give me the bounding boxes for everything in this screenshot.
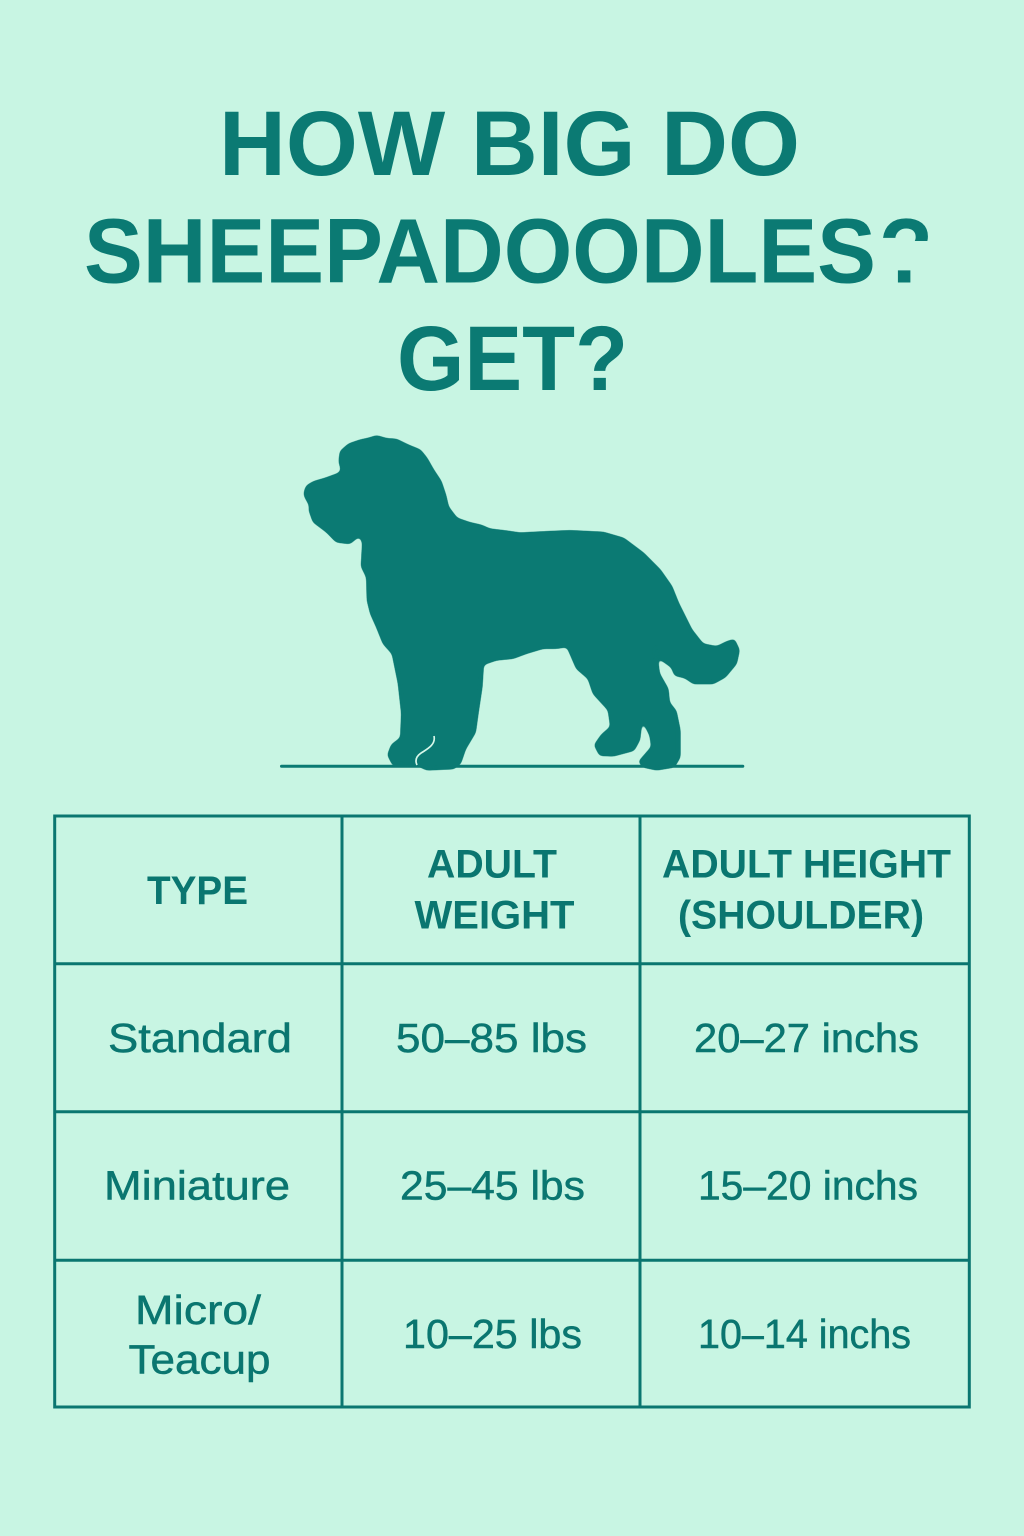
row: micro / teacup: 10–14 inchs	[698, 1311, 911, 1357]
row: standard: 20–27 inchs	[694, 1015, 919, 1061]
header: type: TYPE	[147, 869, 248, 913]
header: adult height (shoulder): (SHOULDER)	[678, 894, 924, 938]
row: micro / teacup: 10–25 lbs	[403, 1311, 582, 1357]
row: micro / teacup	[128, 1287, 911, 1382]
title line 3: GET?	[397, 308, 628, 410]
header: adult weight: ADULT	[427, 842, 557, 886]
header: adult weight	[414, 842, 574, 938]
row: micro / teacup: Micro/	[135, 1287, 262, 1333]
row: standard: 50–85 lbs	[396, 1015, 587, 1061]
title line 2: ?	[879, 200, 933, 302]
title	[84, 93, 936, 410]
table	[55, 816, 969, 1407]
table grid	[55, 816, 969, 1407]
row: micro / teacup: Teacup	[128, 1336, 270, 1382]
header: adult height (shoulder): ADULT HEIGHT	[662, 842, 951, 886]
row: standard: Standard	[108, 1015, 292, 1061]
leg detail line	[416, 736, 434, 765]
dog silhouette	[304, 435, 740, 771]
row: standard	[108, 1015, 919, 1061]
title line 1: HOW BIG DO	[219, 93, 800, 195]
header: adult weight: WEIGHT	[414, 894, 574, 938]
row: miniature: 15–20 inchs	[698, 1162, 918, 1208]
title line 2: SHEEPADOODLES	[84, 200, 876, 302]
row: miniature: Miniature	[104, 1162, 290, 1208]
row: miniature	[104, 1162, 918, 1208]
ground line	[282, 765, 743, 768]
row: miniature: 25–45 lbs	[400, 1162, 585, 1208]
icon: sheepadoodle silhouette on ground line	[282, 435, 743, 771]
header: adult height (shoulder)	[662, 842, 951, 938]
